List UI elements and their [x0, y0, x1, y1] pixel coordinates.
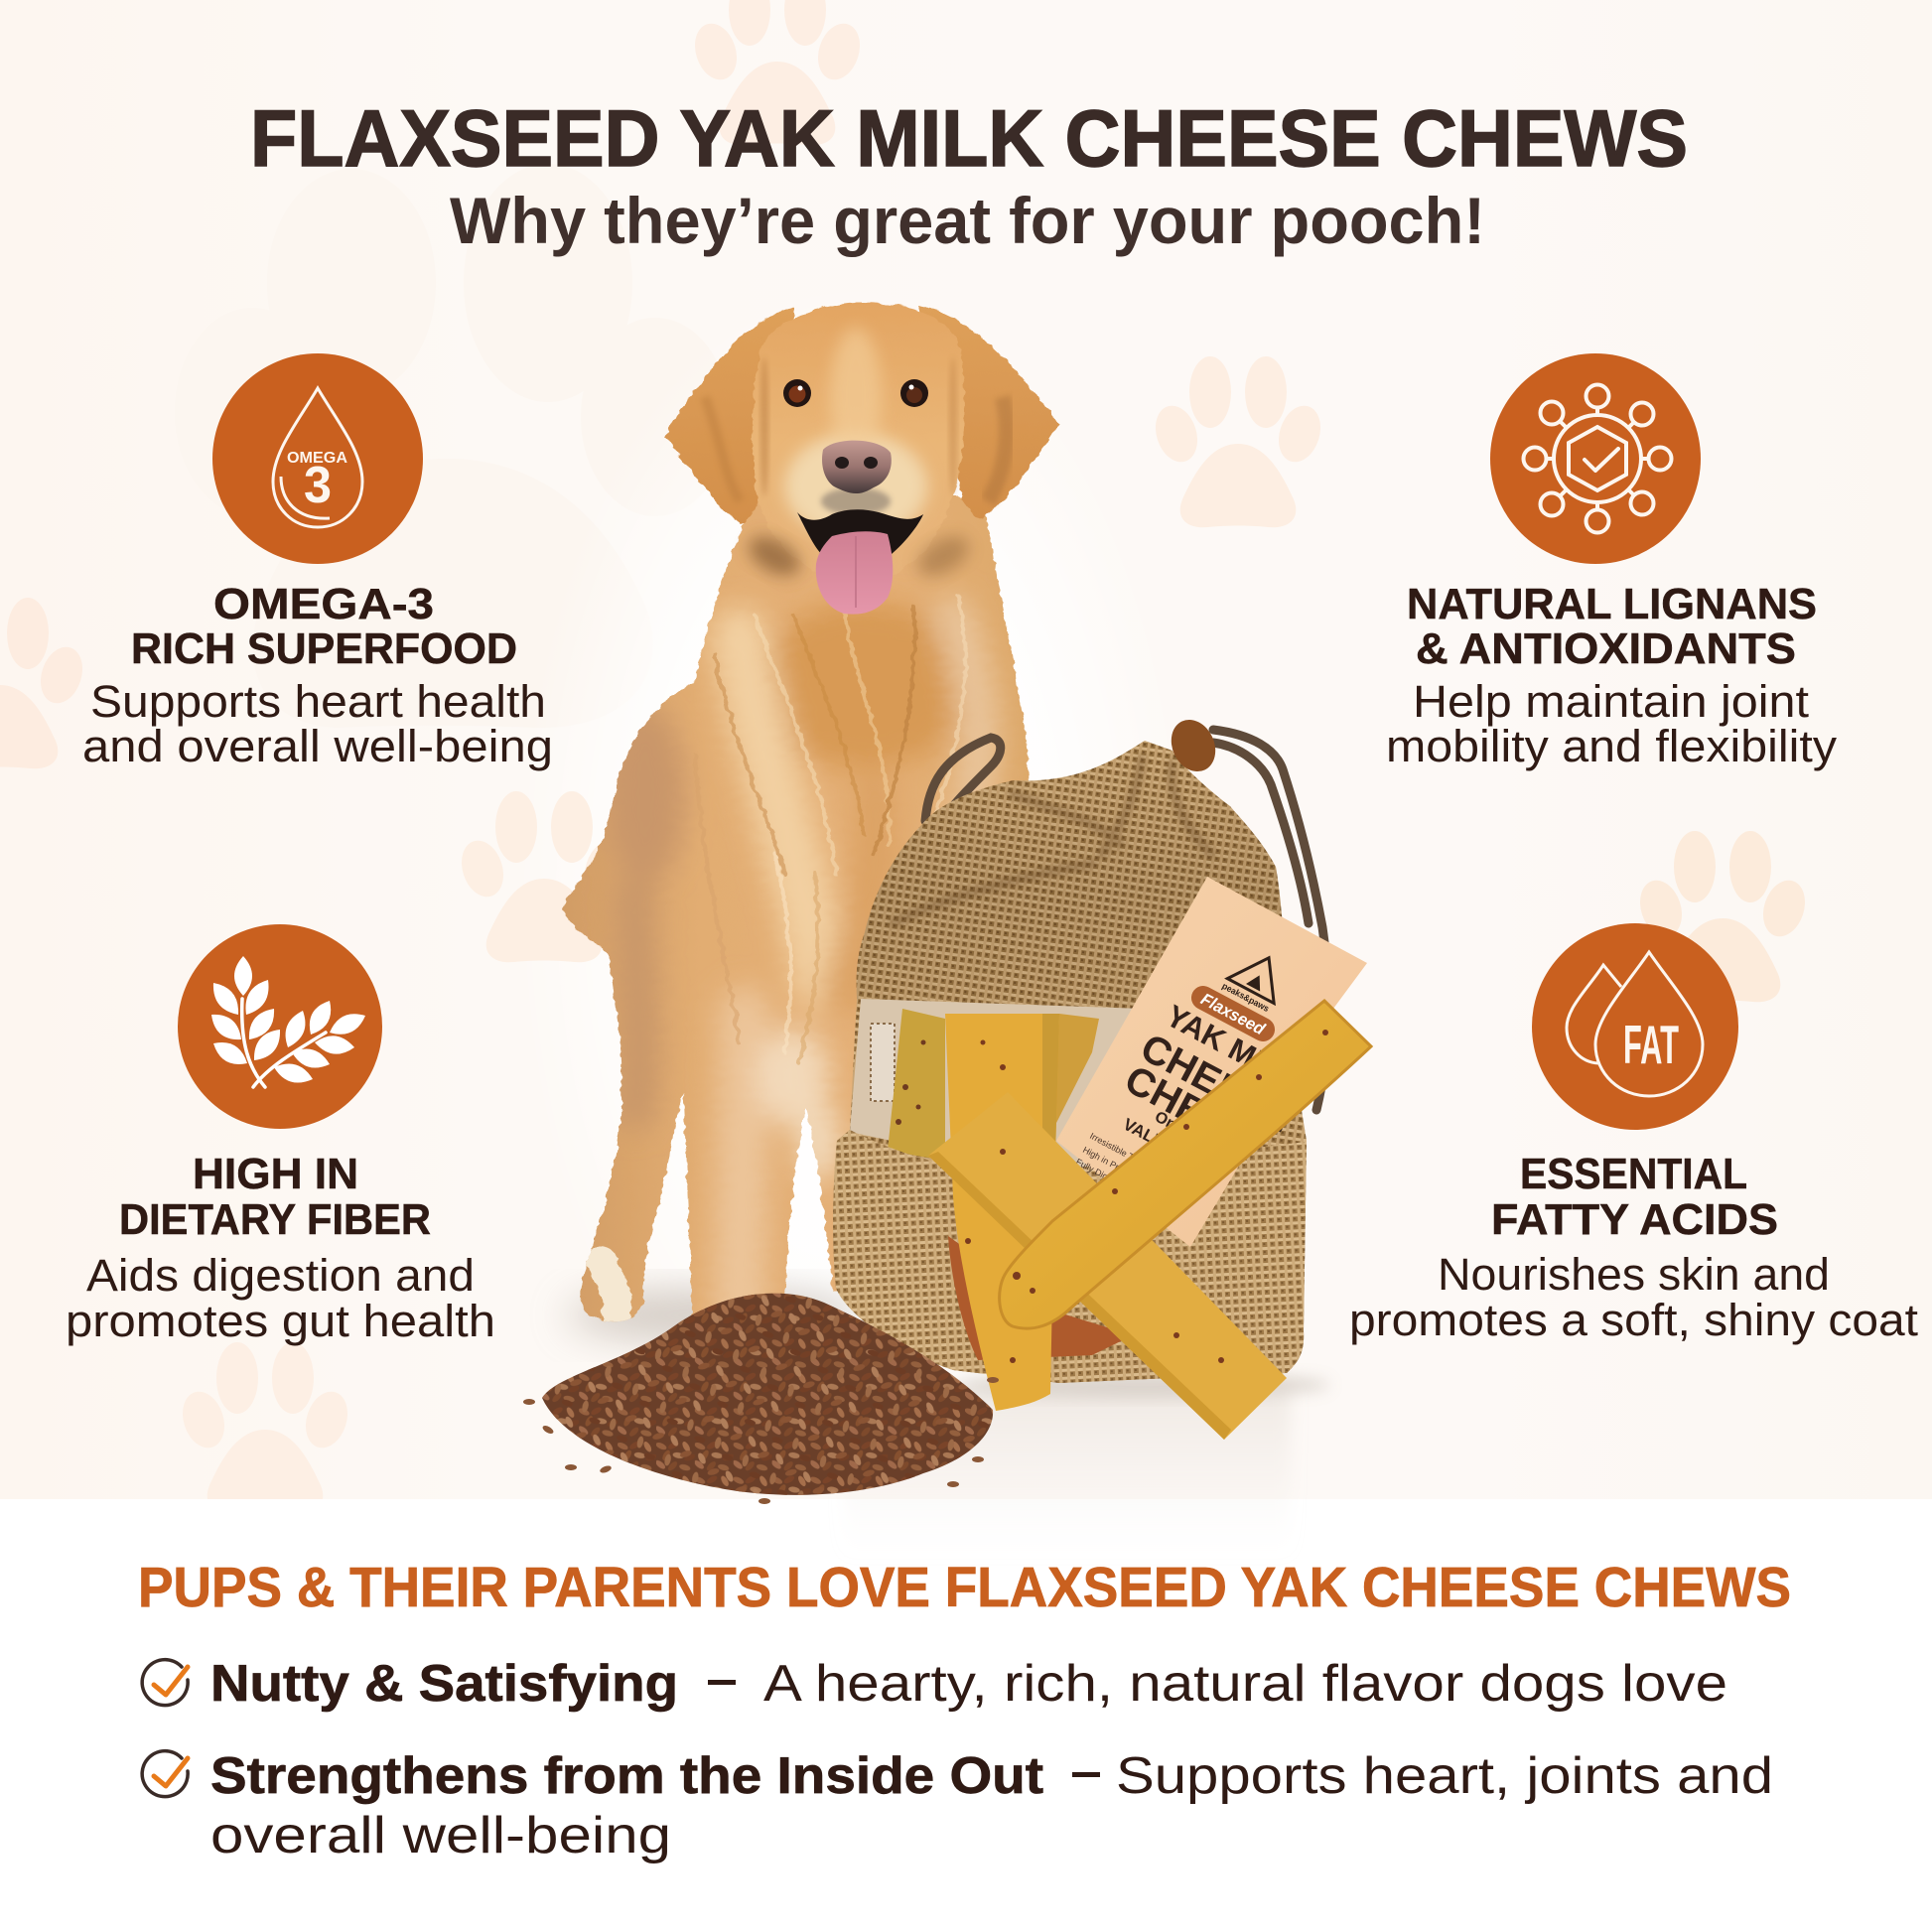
card bullets: Irresistible Taste [1088, 1131, 1150, 1170]
heading: omega-3: RICH SUPERFOOD [131, 624, 517, 673]
card bullets [1074, 1131, 1150, 1193]
heading: fiber [119, 1150, 431, 1244]
text: omega-3 description: and overall well-being [82, 721, 553, 771]
text: omega-3 description [82, 676, 553, 771]
illustration: jute bag with yak cheese chews [833, 713, 1371, 1440]
card label pill: Flaxseed [1197, 990, 1269, 1039]
card bullets: Fully Digestible [1074, 1157, 1133, 1193]
text: fatty acids description: promotes a soft, shiny coat [1349, 1295, 1919, 1345]
list item: strengthens from the inside out: overall well-being [210, 1807, 671, 1864]
icon: omega-3 drop: 3 [304, 457, 332, 514]
chew in window right [1054, 1014, 1099, 1127]
heading: lignans: & ANTIOXIDANTS [1416, 624, 1796, 673]
text: fiber description [66, 1250, 495, 1346]
panel: lignans benefit [1386, 353, 1838, 771]
text: lignans description: Help maintain joint [1413, 676, 1810, 727]
icon: check mark [142, 1660, 188, 1706]
icon: grain sprigs [178, 924, 382, 1129]
illustration: flaxseed pile [523, 1294, 999, 1504]
icon: omega-3 drop [212, 353, 423, 564]
card title: YAK MILK [1161, 998, 1306, 1097]
text: fiber description: Aids digestion and [86, 1250, 475, 1301]
panel: omega-3 benefit [82, 353, 553, 771]
reflection and ground shadow [566, 1290, 1330, 1559]
subtitle: Why they’re great for your pooch! [450, 184, 1485, 257]
text: lignans description: mobility and flexibility [1386, 721, 1838, 771]
icon: antioxidant network [1490, 353, 1701, 564]
illustration: golden retriever [546, 303, 1062, 1350]
card label pill [1187, 982, 1279, 1045]
chew in window left [888, 1009, 945, 1161]
heading: fiber: HIGH IN [193, 1150, 358, 1198]
text: omega-3 description: Supports heart health [90, 676, 546, 727]
heading: omega-3: OMEGA-3 [213, 580, 434, 628]
card bullets: High in Protein [1081, 1145, 1138, 1180]
card title: CHEESE [1134, 1026, 1299, 1141]
chew: long front [1000, 1001, 1371, 1328]
icon: fat drops [1532, 923, 1738, 1130]
section heading: pups and parents: PUPS & THEIR PARENTS LOVE FLAXSEED YAK CHEESE CHEWS [138, 1556, 1791, 1619]
heading: fatty acids: FATTY ACIDS [1491, 1195, 1778, 1244]
dog body [562, 495, 1030, 1322]
card title: VALUE [1120, 1115, 1178, 1158]
text: lignans description [1386, 676, 1838, 771]
list item: nutty and satisfying [142, 1655, 1727, 1713]
background paw prints [0, 0, 1812, 1513]
chew: vertical [945, 1014, 1059, 1411]
list item: strengthens from the inside out [142, 1747, 1773, 1864]
card title: One [1152, 1109, 1187, 1138]
panel: fiber benefit [66, 924, 495, 1346]
chew: diagonal [928, 1092, 1287, 1440]
panel: fatty acids benefit [1349, 923, 1919, 1345]
text: fatty acids description: Nourishes skin and [1438, 1249, 1830, 1300]
card logo [1220, 945, 1292, 1015]
bag pocket [833, 1130, 1307, 1383]
dog left ear [664, 308, 794, 524]
list item: nutty and satisfying: Nutty & Satisfying [210, 1655, 678, 1713]
dog right ear [918, 306, 1058, 518]
dog fur shading [601, 596, 979, 1320]
dog head [753, 303, 965, 586]
card title: CHEWS [1118, 1057, 1269, 1166]
icon: fat drops: FAT [1623, 1014, 1679, 1075]
dog face [705, 328, 1007, 615]
heading: fatty acids: ESSENTIAL [1520, 1150, 1747, 1198]
heading: fatty acids [1491, 1150, 1778, 1244]
heading: lignans [1407, 580, 1817, 673]
leather patch [948, 1236, 1133, 1360]
list item: strengthens from the inside out: Supports heart, joints and [1116, 1747, 1773, 1805]
heading: lignans: NATURAL LIGNANS [1407, 580, 1817, 628]
list item: strengthens from the inside out: Strengthens from the Inside Out [210, 1747, 1043, 1805]
flax specks on chews [965, 1030, 1328, 1363]
clear window [850, 999, 1142, 1172]
icon: check mark [142, 1751, 188, 1797]
heading: omega-3 [131, 580, 517, 673]
rope loops [925, 730, 1328, 1110]
list item: nutty and satisfying: A hearty, rich, natural flavor dogs love [763, 1655, 1727, 1713]
card logo: peaks&paws [1220, 981, 1271, 1014]
wooden bead [1164, 713, 1223, 778]
icon: omega-3 drop: OMEGA [287, 450, 347, 467]
title: FLAXSEED YAK MILK CHEESE CHEWS [250, 94, 1688, 184]
product card [1056, 877, 1367, 1247]
jute bag [833, 741, 1307, 1383]
text: fiber description: promotes gut health [66, 1296, 495, 1346]
card title [1118, 998, 1306, 1166]
heading: fiber: DIETARY FIBER [119, 1195, 431, 1244]
text: fatty acids description [1349, 1249, 1919, 1345]
